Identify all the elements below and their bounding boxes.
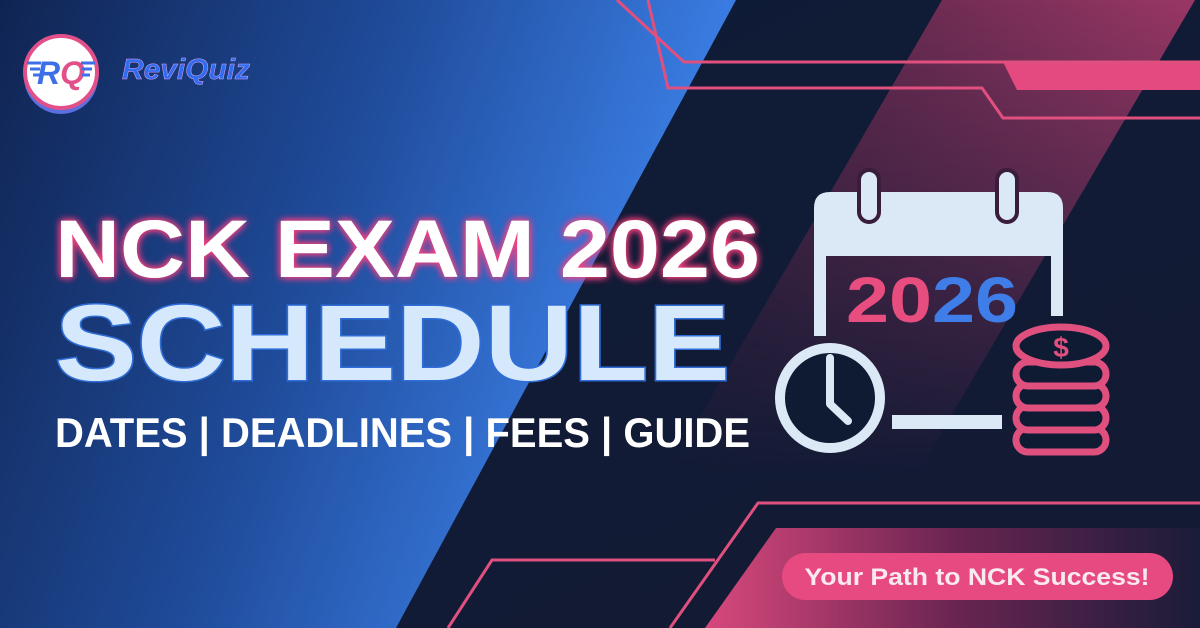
subtitle: DATES | DEADLINES | FEES | GUIDE bbox=[55, 409, 750, 457]
calendar year: 2026 bbox=[846, 264, 1018, 336]
title bbox=[55, 204, 760, 457]
icon: clock bbox=[780, 348, 880, 448]
logo text: ReviQuiz bbox=[122, 54, 251, 86]
title line 2: SCHEDULE bbox=[55, 282, 730, 403]
icon: coins bbox=[1016, 327, 1106, 452]
title line 1: NCK EXAM 2026 bbox=[55, 204, 760, 295]
icon: logo badge bbox=[24, 36, 98, 114]
icon: logo badge: RQ bbox=[37, 55, 85, 91]
logo bbox=[24, 36, 251, 114]
icon: calendar bbox=[814, 170, 1063, 422]
callout: tagline button bbox=[782, 553, 1173, 600]
icon: coins: $ bbox=[1053, 332, 1069, 363]
callout: tagline button: Your Path to NCK Success! bbox=[804, 564, 1150, 591]
